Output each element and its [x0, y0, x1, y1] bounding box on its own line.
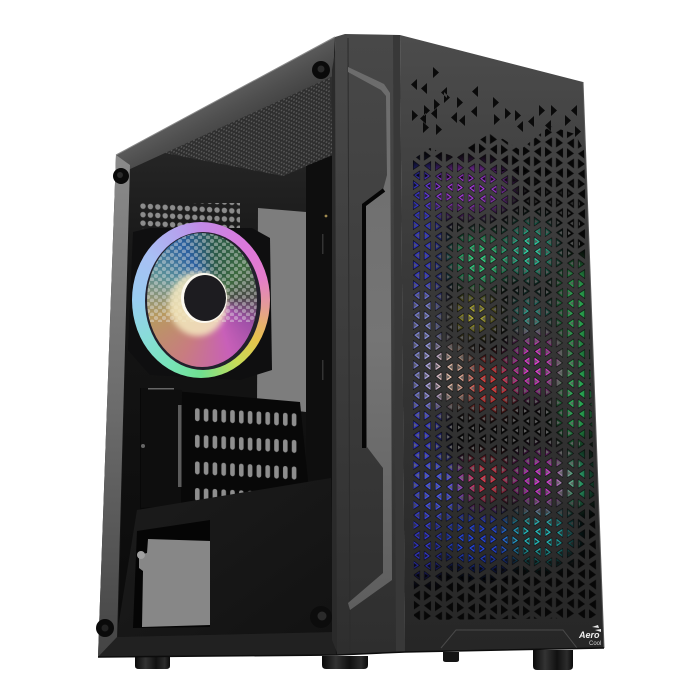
glass left frame — [98, 155, 130, 657]
fan hub — [184, 275, 226, 321]
fan hub glow — [169, 272, 227, 336]
foot front centre — [322, 656, 368, 669]
shroud window — [133, 520, 210, 628]
lower motherboard tray — [140, 388, 308, 480]
base shadow line — [98, 648, 604, 657]
fan ring and disc — [132, 222, 270, 378]
front fan glow lights — [408, 168, 589, 570]
top mesh — [165, 75, 333, 176]
dense triangle perforation — [413, 126, 596, 620]
screw top right — [312, 61, 330, 79]
front panel right edge — [583, 82, 604, 648]
AeroCool logo: Cool — [589, 641, 601, 647]
right interior edge — [332, 40, 338, 655]
glass top edge highlight — [116, 37, 335, 155]
fan hub white rim — [181, 273, 227, 323]
foot rear small — [443, 652, 459, 662]
side interior — [110, 70, 335, 640]
bezel grey accent — [348, 67, 392, 610]
screw bottom left — [96, 619, 114, 637]
bezel black groove — [364, 190, 384, 448]
fan frame — [128, 228, 272, 380]
interior back wall — [110, 70, 335, 640]
bezel right edge — [393, 35, 405, 652]
foot front right — [533, 650, 573, 670]
glass top frame — [116, 37, 335, 170]
bottom rail — [98, 632, 336, 657]
sparse top perforation — [411, 67, 581, 137]
grey plate behind fan — [257, 208, 306, 412]
front face — [400, 35, 604, 652]
PSU shroud — [116, 478, 334, 640]
AeroCool logo: Aero — [578, 630, 600, 640]
case bezel — [335, 34, 405, 655]
front panel — [400, 35, 610, 652]
front fan white highlights — [410, 170, 580, 580]
right cable-routing column — [306, 156, 332, 380]
screw top left — [113, 168, 129, 184]
product photo: PC tower case — [96, 34, 604, 670]
RGB fan — [132, 222, 270, 378]
fan dots — [146, 232, 258, 322]
vent slots — [194, 408, 297, 500]
screw bottom right — [310, 606, 332, 628]
back dots — [140, 203, 240, 229]
bezel vertical seam — [348, 38, 350, 653]
bottom trapezoid moulding — [441, 630, 577, 648]
foot front left — [135, 657, 170, 669]
left bracket — [141, 388, 182, 487]
AeroCool logo — [578, 625, 601, 647]
case side panel base — [98, 37, 337, 657]
